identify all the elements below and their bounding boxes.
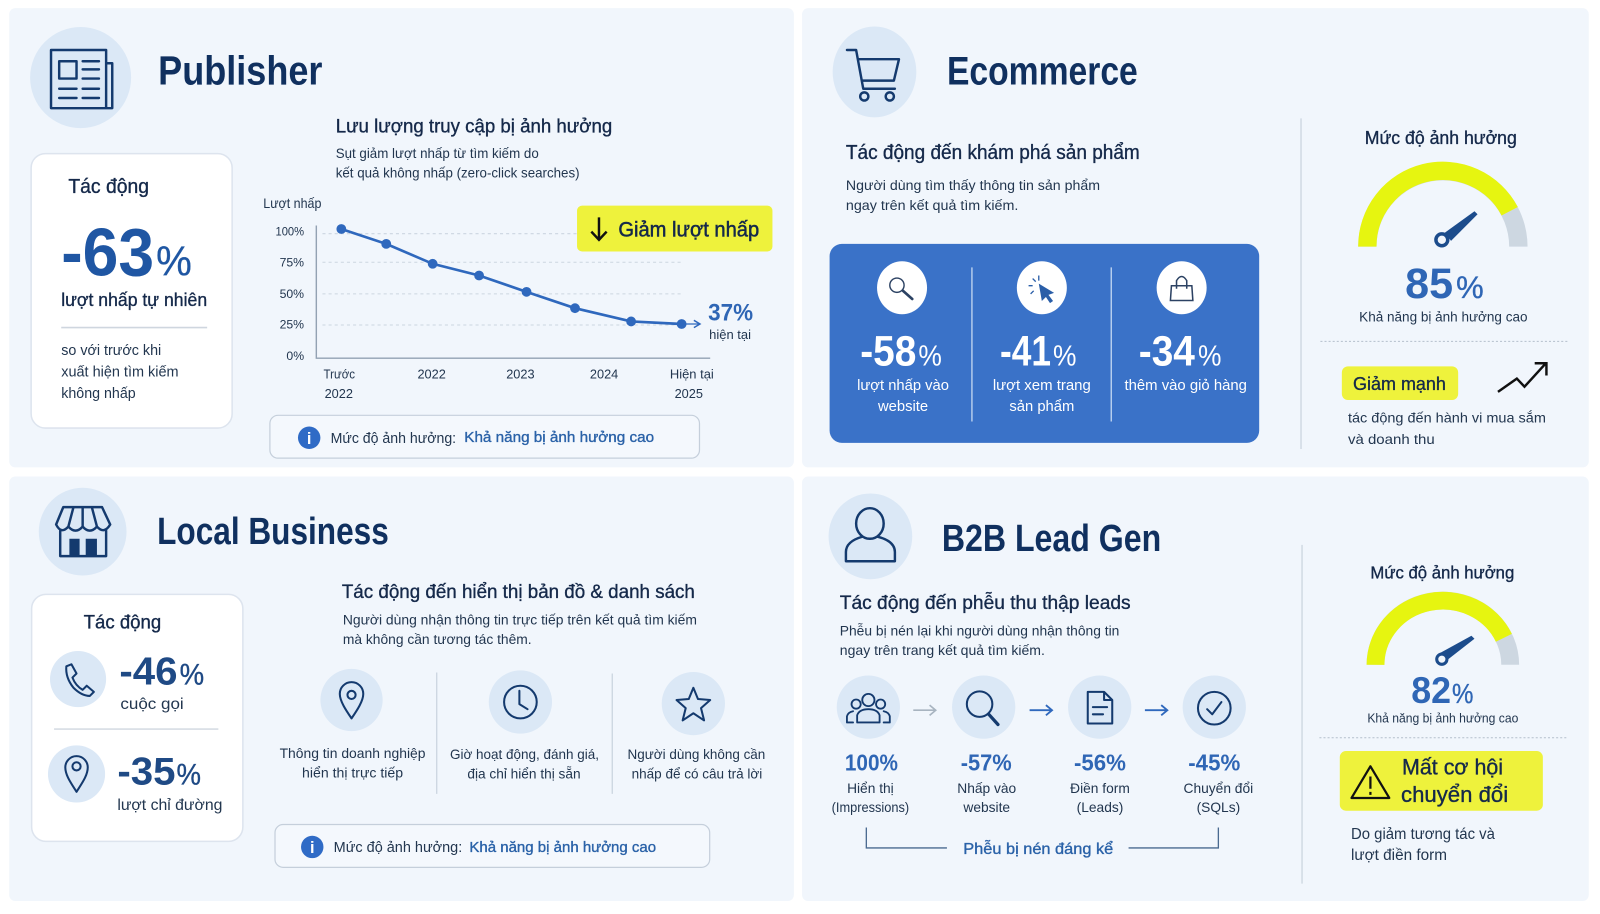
line chart: clicks over time: 0% [286, 349, 304, 363]
funnel: impressions 100%: (Impressions) [832, 800, 909, 815]
line chart: clicks over time: 2025 [675, 386, 703, 401]
gauge: 85%: 85 [1405, 260, 1453, 308]
callout: lost conversion opportunity: Mất cơ hội [1402, 755, 1503, 780]
gauge: 82%: Khả năng bị ảnh hưởng cao [1367, 710, 1518, 725]
heading: B2B Lead Gen: B2B Lead Gen [942, 517, 1161, 559]
line chart: clicks over time: 2024 [590, 367, 618, 382]
gauge: 85%: Khả năng bị ảnh hưởng cao [1359, 309, 1528, 325]
funnel: form fill -56%: -56% [1074, 749, 1126, 775]
callout: impact level: i [307, 430, 311, 448]
heading: Local Business: Local Business [157, 510, 389, 552]
line chart: clicks over time: 2023 [506, 367, 535, 382]
line chart: clicks over time: 2022 [417, 367, 446, 382]
stat: -41% [993, 261, 1091, 415]
arrow [913, 705, 936, 715]
callout: lost conversion opportunity [1340, 751, 1543, 864]
text: lead funnel impact: ngay trên trang kết quả tìm kiếm. [840, 643, 1045, 659]
card: impact -63%: -63 [61, 216, 154, 291]
line chart: clicks over time: Lượt nhấp [263, 196, 322, 211]
gauge: 82%: 82 [1411, 670, 1451, 711]
chart heading [336, 116, 612, 181]
text: lead funnel impact: Phễu bị nén lại khi người dùng nhận thông tin [840, 623, 1119, 640]
gauge: 82%: Mức độ ảnh hưởng [1370, 563, 1514, 583]
line chart: clicks over time: 100% [276, 225, 304, 239]
bracket: funnel compressed [866, 828, 1218, 858]
chart heading: Sụt giảm lượt nhấp từ tìm kiếm do [336, 146, 539, 161]
line chart: clicks over time: hiện tại [709, 327, 751, 342]
item: opening hours: địa chỉ hiển thị sẵn [467, 766, 581, 783]
callout: sharp decline: tác động đến hành vi mua sắm [1348, 409, 1546, 426]
item: business info [280, 669, 426, 782]
callout: lost conversion opportunity: lượt điền form [1351, 847, 1447, 864]
panel: Local Business [9, 477, 794, 901]
stat: -41%: -41 [1000, 327, 1051, 375]
card: impact -63%: Tác động [68, 176, 149, 198]
stat: -58%: % [918, 340, 942, 372]
funnel: website clicks -57%: Nhấp vào [957, 781, 1017, 796]
line chart: clicks over time: Trước [323, 367, 356, 382]
funnel: impressions 100% [832, 676, 909, 815]
funnel: conversion -45%: Chuyển đổi [1184, 781, 1253, 796]
funnel: conversion -45%: (SQLs) [1197, 800, 1240, 815]
line chart: clicks over time: Hiện tại [670, 367, 714, 382]
text: product discovery: Người dùng tìm thấy thông tin sản phẩm [846, 178, 1100, 194]
card: impact -63% [31, 154, 232, 428]
metric: directions -35%: -35 [117, 751, 176, 794]
text: product discovery [846, 142, 1140, 214]
callout: lost conversion opportunity: Do giảm tương tác và [1351, 826, 1495, 843]
funnel: impressions 100%: 100% [845, 749, 898, 775]
stat: -34%: thêm vào giỏ hàng [1124, 378, 1247, 394]
panel: Publisher [9, 8, 794, 467]
item: business info: hiển thị trực tiếp [302, 766, 403, 782]
metric: directions -35%: % [177, 759, 201, 792]
funnel: conversion -45% [1183, 676, 1253, 815]
item: no click needed: Người dùng không cần [628, 747, 765, 763]
funnel: conversion -45%: -45% [1188, 749, 1240, 775]
icon: newspaper [30, 27, 131, 128]
line chart: clicks over time: 50% [280, 287, 304, 301]
callout: fewer clicks [577, 206, 772, 252]
funnel: website clicks -57%: website [962, 800, 1010, 815]
item: no click needed [628, 672, 765, 783]
callout: impact level [270, 415, 699, 458]
metric: directions -35%: lượt chỉ đường [117, 797, 222, 814]
gauge: 82% [1367, 563, 1518, 725]
funnel: form fill -56% [1068, 676, 1131, 815]
arrow [1030, 705, 1052, 715]
funnel: form fill -56%: Điền form [1070, 781, 1130, 796]
stat: -34% [1124, 261, 1247, 394]
card: impact -63%: không nhấp [61, 386, 136, 402]
card: impact -63%: xuất hiện tìm kiếm [61, 365, 179, 381]
panel: B2B Lead Gen [802, 477, 1589, 901]
stat: -41%: sản phẩm [1009, 399, 1074, 415]
stat: -58%: lượt nhấp vào [857, 378, 949, 394]
stat: -34%: -34 [1139, 327, 1195, 375]
chart heading: kết quả không nhấp (zero-click searches) [336, 166, 580, 181]
text: lead funnel impact [840, 591, 1131, 659]
heading: Publisher: Publisher [158, 48, 323, 94]
gauge: 85% [1359, 127, 1528, 325]
metric: calls -46%: cuộc gọi [120, 696, 184, 713]
card: impact -63%: so với trước khi [61, 343, 161, 359]
callout: impact level: Mức độ ảnh hưởng: [331, 431, 456, 447]
funnel: impressions 100%: Hiển thị [847, 781, 894, 796]
callout: impact level: i [310, 839, 315, 857]
card: impact metrics: Tác động [84, 612, 161, 634]
chart heading: Lưu lượng truy cập bị ảnh hưởng [336, 116, 612, 138]
line chart: clicks over time [263, 196, 753, 401]
callout: impact level: Khả năng bị ảnh hưởng cao [469, 840, 656, 856]
card: impact -63%: % [156, 238, 192, 285]
item: opening hours [450, 670, 599, 783]
line chart: clicks over time: 37% [708, 299, 753, 326]
funnel: website clicks -57%: -57% [961, 749, 1012, 775]
funnel: website clicks -57% [952, 676, 1017, 815]
heading: Ecommerce: Ecommerce [947, 50, 1138, 94]
text: product discovery: Tác động đến khám phá sản phẩm [846, 142, 1140, 164]
callout: impact level [275, 824, 710, 867]
stat: -58%: -58 [860, 327, 916, 375]
line chart: clicks over time: 2022 [325, 386, 353, 401]
metric: calls -46%: % [180, 659, 204, 692]
arrow [1145, 705, 1167, 715]
gauge: 85%: % [1456, 269, 1484, 305]
metric: calls -46% [50, 651, 204, 713]
text: map and listing impact: Người dùng nhận thông tin trực tiếp trên kết quả tìm kiếm [343, 613, 697, 629]
callout: lost conversion opportunity: chuyển đổi [1401, 782, 1508, 807]
text: product discovery: ngay trên kết quả tìm kiếm. [846, 198, 1018, 214]
bracket: funnel compressed: Phễu bị nén đáng kể [963, 839, 1113, 858]
panel: Ecommerce [802, 8, 1589, 467]
metric: directions -35% [48, 745, 222, 814]
gauge: 85%: Mức độ ảnh hưởng [1365, 127, 1517, 148]
stat: -41%: lượt xem trang [993, 378, 1091, 394]
card: impact metrics [32, 594, 243, 841]
gauge: 82%: % [1452, 678, 1473, 709]
panel: blue stats [830, 244, 1259, 443]
text: map and listing impact [342, 581, 697, 648]
callout: sharp decline: Giảm mạnh [1353, 373, 1446, 394]
metric: calls -46%: -46 [119, 651, 178, 694]
line chart: clicks over time: 75% [280, 255, 304, 269]
callout: impact level: Mức độ ảnh hưởng: [334, 840, 462, 856]
callout: fewer clicks: Giảm lượt nhấp [618, 218, 759, 242]
icon: store [39, 488, 127, 576]
card: impact -63%: lượt nhấp tự nhiên [61, 289, 207, 310]
icon: cart [833, 27, 916, 117]
stat: -34%: % [1198, 340, 1221, 372]
item: no click needed: nhấp để có câu trả lời [632, 767, 762, 783]
stat: -58% [857, 261, 949, 415]
item: business info: Thông tin doanh nghiệp [280, 746, 426, 762]
callout: impact level: Khả năng bị ảnh hưởng cao [464, 430, 654, 446]
text: map and listing impact: Tác động đến hiển thị bản đồ & danh sách [342, 581, 695, 603]
callout: sharp decline [1342, 363, 1546, 448]
text: map and listing impact: mà không cần tương tác thêm. [343, 632, 532, 648]
callout: sharp decline: và doanh thu [1348, 432, 1435, 448]
icon: person [829, 493, 912, 579]
item: opening hours: Giờ hoạt động, đánh giá, [450, 747, 599, 763]
stat: -41%: % [1053, 340, 1077, 372]
stat: -58%: website [877, 399, 928, 415]
text: lead funnel impact: Tác động đến phễu thu thập leads [840, 591, 1131, 614]
line chart: clicks over time: 25% [280, 318, 304, 332]
funnel: form fill -56%: (Leads) [1077, 800, 1123, 815]
